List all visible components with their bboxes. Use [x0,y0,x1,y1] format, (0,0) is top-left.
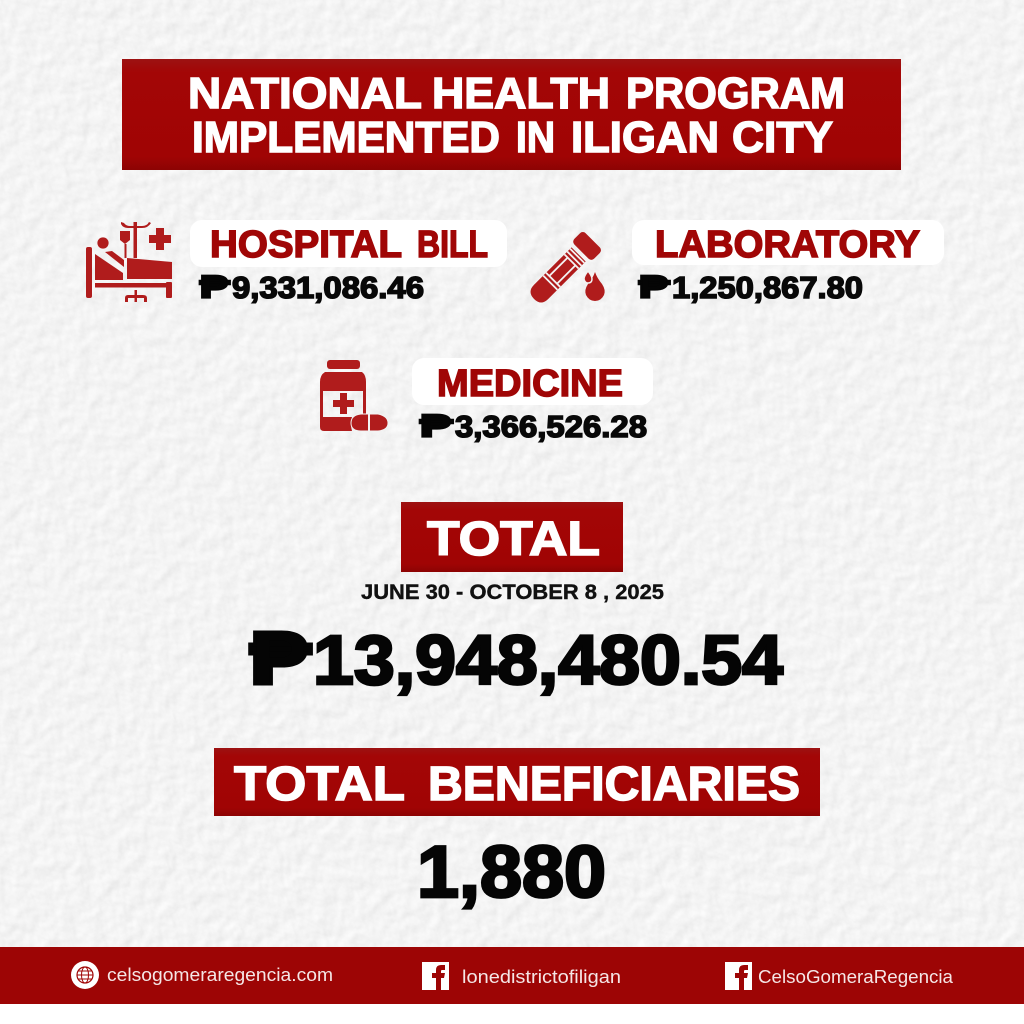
date range: JUNE 30 - OCTOBER 8 , 2025 [361,581,664,604]
label pill [412,358,653,405]
panel: medicine [320,358,653,445]
label text: HOSPITAL [210,224,402,266]
panel: hospital bill: 9,331,086.46 [232,270,424,305]
title banner: HEALTH [432,69,610,118]
icon: facebook [725,962,752,990]
total amount: 13,948,480.54 [313,621,783,699]
title banner: PROGRAM [626,69,845,118]
title banner: CITY [732,113,833,162]
amount: ₱ [637,270,671,306]
label pill [632,220,944,265]
beneficiaries heading: BENEFICIARIES [428,758,800,811]
label text: LABORATORY [655,224,920,266]
icon: facebook [422,962,449,990]
title banner: ILIGAN [571,113,719,162]
total badge [401,502,623,572]
website: celsogomeraregencia.com [107,964,333,985]
amount: ₱ [418,409,454,445]
label pill [190,220,507,267]
panel: medicine: 3,366,526.28 [455,409,647,444]
amount: ₱ [198,270,231,306]
icon: hospital bed [86,222,172,302]
beneficiaries badge [214,748,820,816]
label text: MEDICINE [437,363,623,405]
panel: laboratory [524,220,944,309]
panel: total beneficiaries [214,748,820,913]
icon: test tube and blood drop [524,230,605,309]
facebook page: lonedistrictofiligan [462,966,621,987]
panel: hospital bill [86,220,507,306]
panel: total [247,502,783,701]
facebook profile: CelsoGomeraRegencia [758,966,954,987]
beneficiaries count: 1,880 [417,832,606,913]
panel: hospital bill: BILL [417,224,488,266]
icon: globe [71,961,99,989]
icon: medicine bottle and pill [320,360,388,431]
beneficiaries heading [234,758,800,811]
footer bar [0,947,1024,1004]
title banner: IMPLEMENTED [192,113,500,162]
total amount: ₱ [247,618,312,701]
total heading: TOTAL [427,513,600,566]
beneficiaries heading: TOTAL [234,758,405,811]
title banner: IN [516,113,555,162]
panel: laboratory: 1,250,867.80 [672,270,863,305]
title banner [122,59,901,170]
title banner: NATIONAL [188,69,422,118]
